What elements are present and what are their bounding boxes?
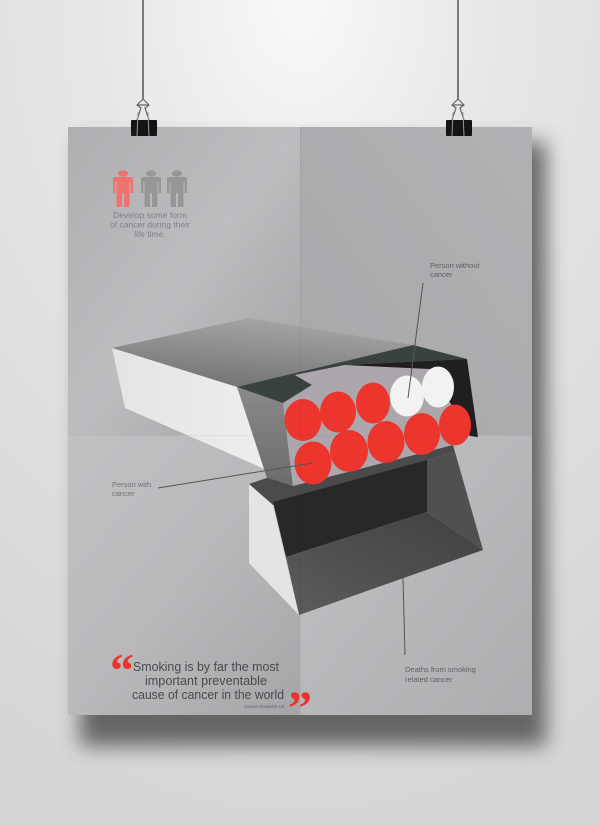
right inner wall [427, 452, 483, 550]
lower white face [249, 484, 299, 615]
pack lid top face [112, 318, 413, 387]
label: person without cancer: cancer [430, 270, 453, 279]
label: person with cancer: cancer [112, 489, 135, 498]
poster sheet [68, 127, 532, 715]
pack lid white face [112, 348, 267, 470]
icon: opening quote mark: “ [110, 644, 134, 698]
quote source: Cancer Research UK [244, 704, 285, 709]
icon: person without cancer [141, 170, 161, 207]
label: deaths from smoking: Deaths from smoking [405, 665, 476, 674]
quote text [132, 660, 284, 702]
quote text: important preventable [145, 674, 267, 688]
lower flap [249, 445, 455, 505]
fold lines [68, 127, 532, 715]
quote text: Smoking is by far the most [133, 660, 280, 674]
people as cigarettes: white circles without cancer [390, 366, 454, 416]
floor [286, 512, 483, 615]
label: person without cancer: Person without [430, 261, 481, 270]
icon: three people, one with cancer [113, 170, 187, 207]
poster shadow [80, 142, 546, 746]
icon: person with cancer [113, 170, 133, 207]
text: cancer statistic: life time. [134, 229, 166, 239]
leader line: deaths [403, 578, 405, 655]
people as cigarettes: red circles with cancer [284, 382, 471, 484]
quote text: cause of cancer in the world [132, 688, 284, 702]
text: cancer statistic: of cancer during their [110, 220, 190, 230]
back wall [273, 460, 427, 557]
left hanging string and clip [131, 0, 157, 136]
pack side grey face [237, 387, 293, 505]
label: person without cancer [430, 261, 481, 279]
right hanging string and clip [446, 0, 472, 136]
label: deaths from smoking [405, 665, 476, 684]
label: person with cancer: Person with [112, 480, 151, 489]
leader line: person with cancer [158, 463, 313, 488]
pack black inner right wall [345, 359, 478, 437]
icon: closing quote mark: ” [288, 682, 312, 735]
pack inner cavity [283, 365, 470, 486]
label: person with cancer [112, 480, 151, 498]
label: deaths from smoking: related cancer [405, 675, 453, 684]
icon: person without cancer [167, 170, 187, 207]
text: cancer statistic [110, 210, 190, 239]
pack dark green band [237, 345, 467, 403]
text: cancer statistic: Develop some form [113, 210, 187, 220]
quote block [110, 644, 312, 735]
cigarette pack illustration [112, 318, 483, 615]
leader line: person without cancer [408, 283, 423, 398]
